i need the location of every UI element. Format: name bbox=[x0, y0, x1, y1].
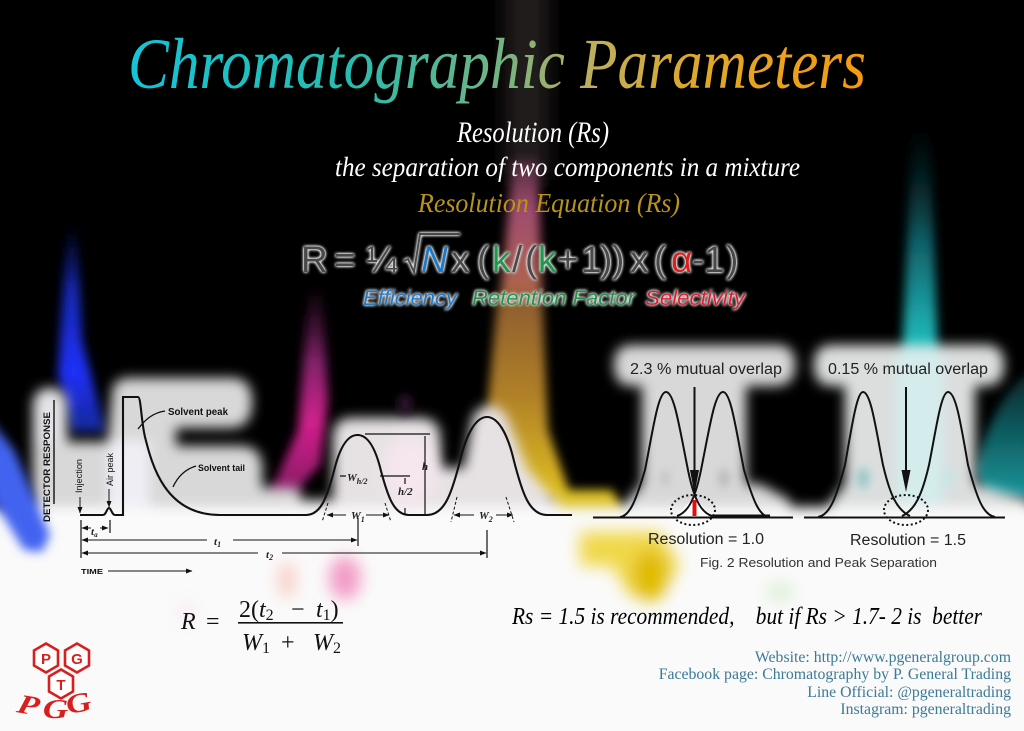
arrow bbox=[902, 387, 910, 492]
dimension labels: a bbox=[94, 531, 98, 539]
chart: resolution 1.5 bbox=[804, 361, 1005, 549]
resolution label: Resolution = 1.5 bbox=[850, 532, 966, 549]
dimension labels: W bbox=[351, 510, 361, 522]
dimension labels: 2 bbox=[268, 553, 273, 562]
dimension labels: t bbox=[266, 549, 269, 561]
resolution equation: ) bbox=[612, 239, 624, 280]
heading: resolution: Resolution (Rs) bbox=[456, 116, 609, 149]
resolution equation: ( bbox=[477, 239, 490, 280]
peak annotations: TIME bbox=[81, 567, 103, 576]
resolution equation: ¼ bbox=[366, 239, 398, 280]
logo: PGT hexagons: T bbox=[56, 677, 66, 694]
resolution formula: 1 bbox=[262, 640, 270, 657]
logo wordmark PGG: PGG bbox=[13, 686, 96, 724]
overlap fill bbox=[676, 497, 712, 516]
peak annotations bbox=[74, 407, 245, 576]
resolution formula: ) bbox=[331, 597, 339, 623]
resolution formula: 2( bbox=[239, 597, 259, 623]
logo: PGT hexagons bbox=[13, 644, 96, 724]
red overlap marker bbox=[692, 500, 696, 516]
pale colour bleeding in the lower area bbox=[178, 434, 794, 624]
resolution equation bbox=[301, 234, 738, 280]
overlapping peaks bbox=[593, 392, 793, 518]
chart: chromatogram with retention times bbox=[42, 397, 572, 576]
resolution formula: 2 bbox=[333, 640, 341, 657]
chromatogram trace bbox=[80, 397, 572, 515]
dimension labels: h/2 bbox=[357, 477, 367, 486]
dimension labels: 1 bbox=[361, 515, 365, 524]
dimension labels: 2 bbox=[488, 515, 493, 524]
peak annotations: Air peak bbox=[105, 453, 115, 486]
overlap label: 2.3 % mutual overlap bbox=[630, 361, 782, 378]
peak annotations: Solvent peak bbox=[168, 407, 228, 418]
left blue band bbox=[0, 420, 50, 552]
resolution equation: R bbox=[301, 239, 328, 280]
glow panels behind charts bbox=[0, 345, 1024, 731]
label: selectivity: Selectivity bbox=[645, 287, 747, 310]
resolution equation: 1 bbox=[581, 239, 602, 280]
resolution equation: = bbox=[334, 239, 356, 280]
dimension lines and arrows bbox=[54, 400, 514, 571]
resolution formula: t bbox=[316, 597, 324, 623]
resolution equation: ) bbox=[726, 239, 738, 280]
subheading: definition: the separation of two components in a mixture bbox=[335, 152, 800, 182]
dimension labels: t bbox=[91, 526, 94, 538]
peak annotations: Solvent tail bbox=[198, 463, 245, 473]
arrow bbox=[690, 387, 699, 494]
contact details bbox=[659, 649, 1012, 718]
pale spots inside chart panels bbox=[398, 394, 953, 488]
resolution equation: x bbox=[630, 239, 649, 280]
resolution formula: W bbox=[242, 630, 264, 656]
chart: resolution 1.0 bbox=[593, 361, 793, 548]
resolution equation: ( bbox=[654, 239, 667, 280]
left band bbox=[33, 388, 67, 538]
resolution equation: 1 bbox=[704, 239, 725, 280]
contact details: Facebook page: Chromatography by P. General Trading bbox=[659, 666, 1011, 683]
dimension labels: 1 bbox=[217, 540, 221, 549]
separated peaks bbox=[804, 392, 1005, 518]
resolution equation: ) bbox=[600, 239, 612, 280]
dimension labels: h/2 bbox=[398, 486, 413, 498]
resolution equation: + bbox=[557, 239, 579, 280]
dimension labels: W bbox=[347, 472, 357, 484]
resolution label: Resolution = 1.0 bbox=[648, 531, 764, 548]
resolution formula: 1 bbox=[323, 607, 331, 624]
resolution formula: = bbox=[206, 609, 220, 635]
logo: PGT hexagons: P bbox=[41, 651, 51, 668]
equation term labels bbox=[363, 287, 747, 310]
title: Chromatographic Parameters bbox=[128, 24, 866, 104]
logo: PGT hexagons: G bbox=[71, 651, 83, 668]
resolution formula: − bbox=[291, 597, 305, 623]
contact details: Line Official: @pgeneraltrading bbox=[807, 684, 1011, 701]
resolution equation: / bbox=[512, 239, 523, 280]
y axis label: DETECTOR RESPONSE bbox=[42, 412, 53, 522]
resolution formula: R bbox=[180, 609, 196, 635]
contact details: Instagram: pgeneraltrading bbox=[840, 701, 1011, 718]
resolution equation: x bbox=[451, 239, 470, 280]
resolution equation: ( bbox=[525, 239, 538, 280]
resolution equation: α bbox=[671, 239, 692, 280]
overlap label: 0.15 % mutual overlap bbox=[828, 361, 988, 378]
resolution formula: 2 bbox=[266, 607, 274, 624]
resolution equation: k bbox=[538, 239, 557, 280]
dotted ellipse bbox=[671, 495, 715, 525]
resolution equation: N bbox=[421, 239, 448, 280]
resolution formula: t bbox=[259, 597, 267, 623]
dotted ellipse bbox=[884, 495, 928, 525]
subheading: resolution equation: Resolution Equation (Rs) bbox=[417, 188, 680, 218]
peak annotations: Injection bbox=[74, 459, 84, 493]
resolution formula: W bbox=[313, 630, 335, 656]
dimension labels: h bbox=[422, 461, 428, 473]
resolution formula: + bbox=[281, 630, 295, 656]
dimension labels bbox=[91, 461, 493, 562]
label: retention factor: Retention Factor bbox=[472, 287, 636, 310]
right panels bbox=[592, 345, 795, 540]
label: efficiency: Efficiency bbox=[363, 287, 459, 310]
dimension labels: W bbox=[479, 510, 489, 522]
resolution equation: - bbox=[692, 239, 704, 280]
resolution formula bbox=[180, 597, 343, 657]
contact details: Website: http://www.pgeneralgroup.com bbox=[755, 649, 1012, 666]
dimension labels: t bbox=[214, 536, 217, 548]
resolution equation: k bbox=[492, 239, 511, 280]
figure caption: Fig. 2 Resolution and Peak Separation bbox=[700, 555, 937, 570]
